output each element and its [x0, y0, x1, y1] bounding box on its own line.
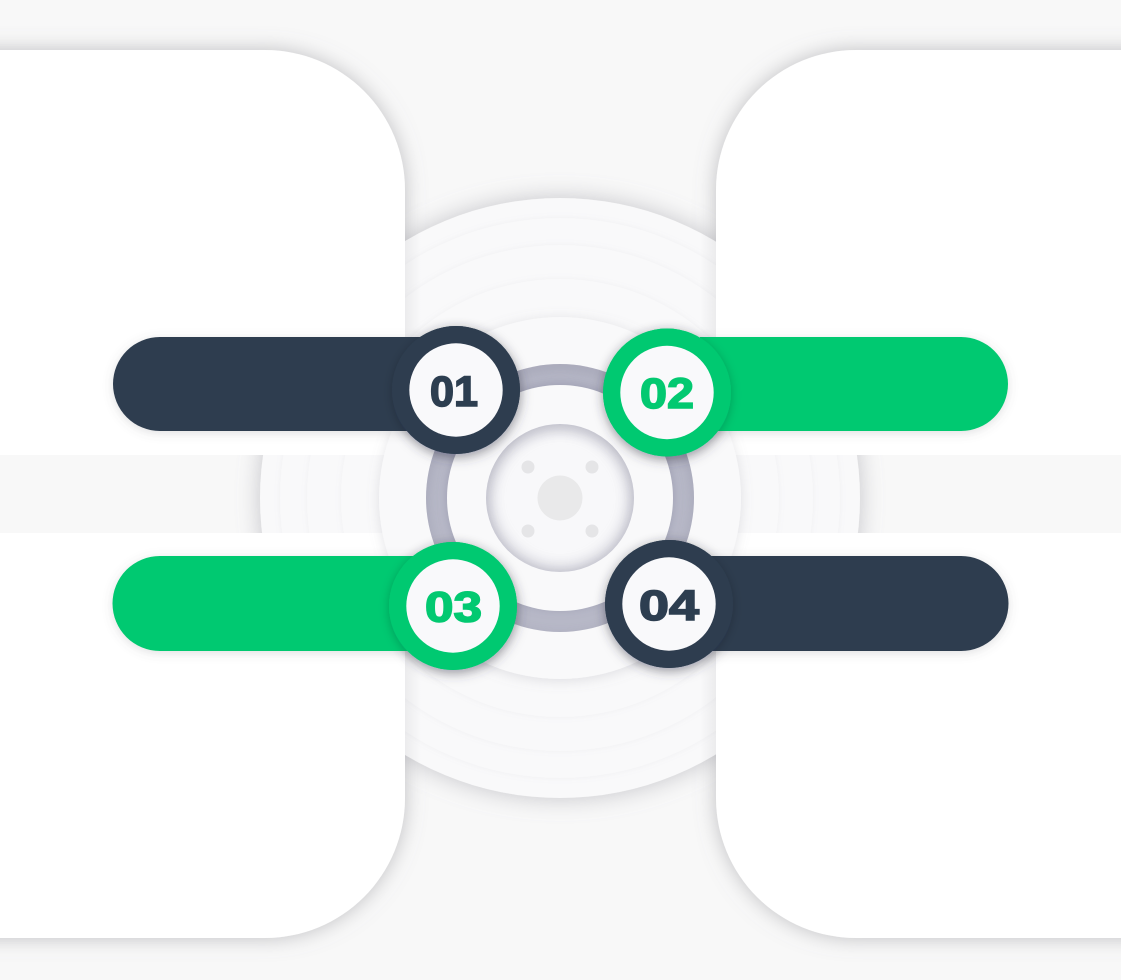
- bar 03 green: [112, 556, 420, 651]
- badge drop shadows: [389, 326, 733, 670]
- bar 01 navy: [113, 337, 420, 431]
- central disk: [379, 317, 741, 679]
- badge 04: 04: [639, 582, 699, 630]
- badge 04: [605, 540, 733, 668]
- badge 03: [389, 542, 517, 670]
- badge 02: [603, 328, 731, 456]
- badge 02: 02: [640, 370, 694, 418]
- badge 01: [392, 326, 520, 454]
- panel: left white card: [0, 50, 405, 938]
- grey ring: [422, 364, 698, 641]
- bar 04 navy: [700, 556, 1009, 651]
- bar 02 green: [700, 337, 1008, 431]
- center hub: [486, 424, 634, 572]
- hub small dots: [522, 460, 598, 538]
- badge 03: 03: [425, 584, 482, 632]
- badge 01: 01: [430, 368, 478, 416]
- concentric background circles: [249, 187, 871, 809]
- panel: right white card: [716, 50, 1121, 938]
- horizontal band behind the circles: [0, 455, 1121, 533]
- hub center dot: [538, 476, 582, 520]
